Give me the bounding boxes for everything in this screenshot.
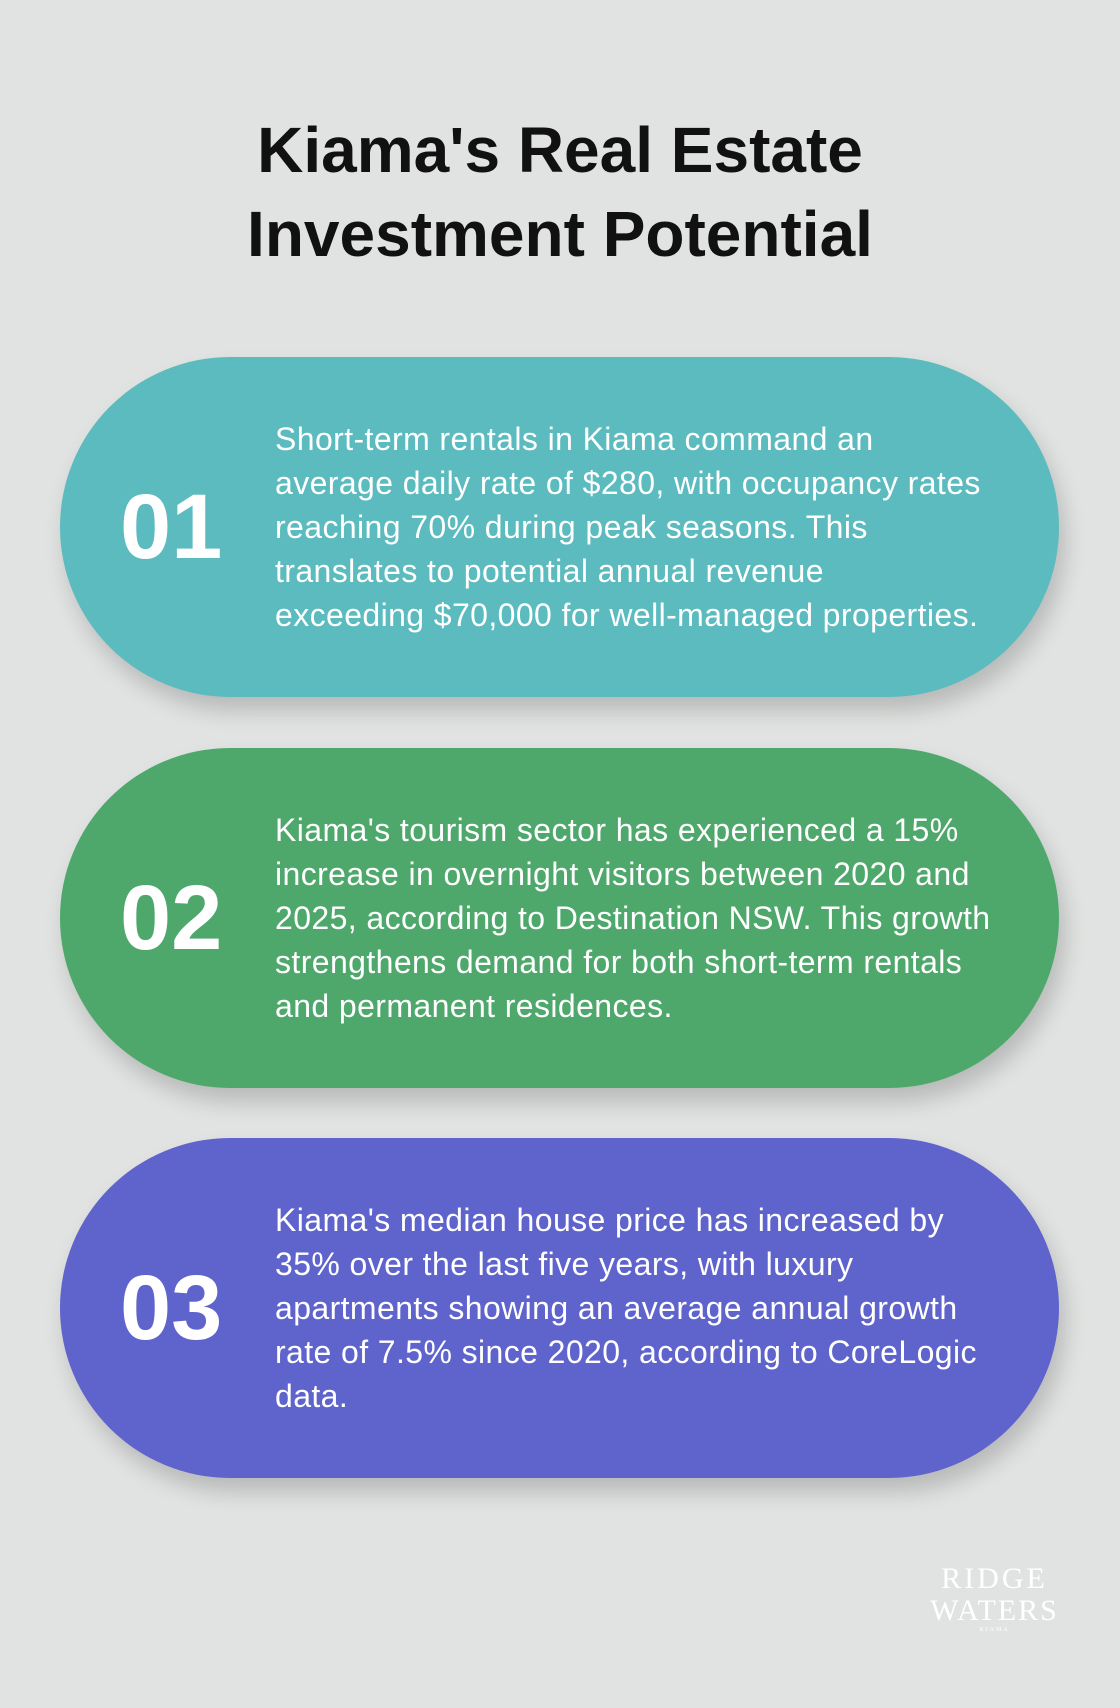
logo: Ridge Waters Kiama: KIAMA [979, 1627, 1010, 1633]
text block 02: strengthens demand for both short-term rentals [275, 944, 962, 980]
text block 01: translates to potential annual revenue [275, 553, 824, 589]
panel: 01 short-term rentals [60, 357, 1059, 697]
text block 03: 35% over the last five years, with luxury [275, 1246, 853, 1282]
text block 02 [275, 812, 990, 1024]
text block 02: increase in overnight visitors between 2020 and [275, 856, 970, 892]
text block 02: and permanent residences. [275, 988, 673, 1024]
title: Investment Potential [247, 198, 873, 270]
panel: 02 tourism [60, 748, 1059, 1088]
text block 03: data. [275, 1378, 348, 1414]
text block 01: average daily rate of $280, with occupancy rates [275, 465, 981, 501]
logo: Ridge Waters Kiama: RIDGE [941, 1562, 1048, 1595]
text block 03: Kiama's median house price has increased by [275, 1202, 944, 1238]
logo: Ridge Waters Kiama: WATERS [930, 1594, 1059, 1627]
text block 01: reaching 70% during peak seasons. This [275, 509, 868, 545]
title: Kiama's Real Estate [257, 114, 863, 186]
text block 01: Short-term rentals in Kiama command an [275, 421, 874, 457]
title [247, 114, 873, 270]
logo: Ridge Waters Kiama [930, 1562, 1059, 1633]
number 01: 01 [120, 476, 222, 578]
text block 03 [275, 1202, 977, 1414]
text block 01 [275, 421, 981, 633]
number 02: 02 [120, 867, 222, 969]
text block 02: 2025, according to Destination NSW. This growth [275, 900, 990, 936]
panel: 03 house prices [60, 1138, 1059, 1478]
text block 03: apartments showing an average annual growth [275, 1290, 958, 1326]
text block 01: exceeding $70,000 for well-managed properties. [275, 597, 978, 633]
text block 02: Kiama's tourism sector has experienced a 15% [275, 812, 959, 848]
text block 03: rate of 7.5% since 2020, according to CoreLogic [275, 1334, 977, 1370]
number 03: 03 [120, 1257, 222, 1359]
